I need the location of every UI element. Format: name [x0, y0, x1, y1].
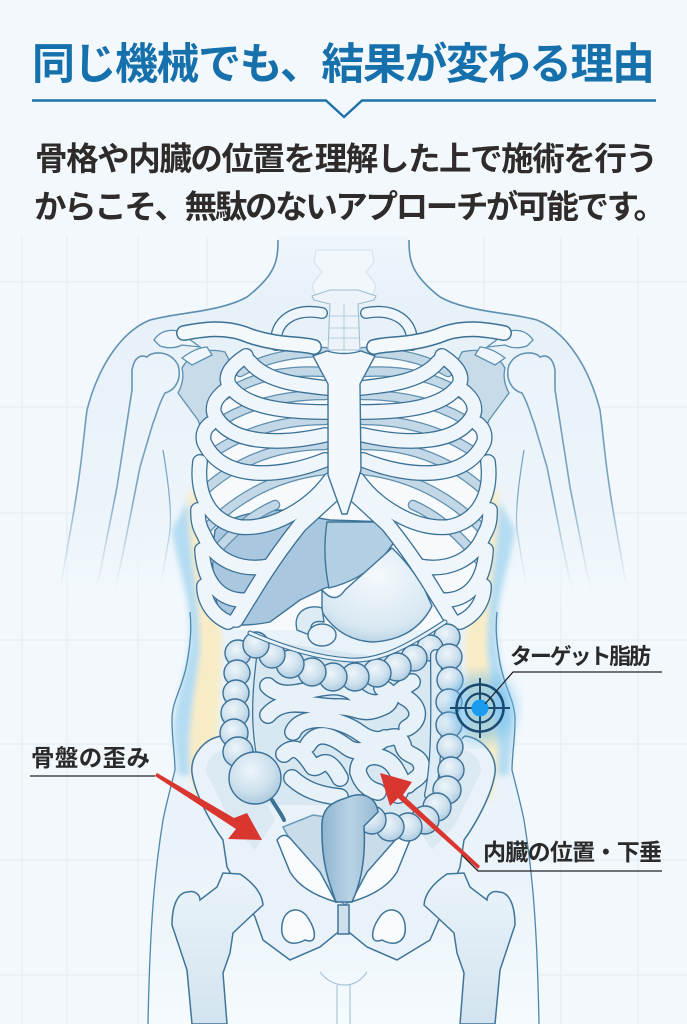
scapulae and acromion — [154, 330, 533, 440]
sternum — [313, 351, 375, 514]
back ribs right — [363, 352, 483, 562]
front ribs left — [198, 356, 336, 622]
rectum — [322, 795, 378, 902]
fat layer bands — [172, 490, 515, 800]
humerus right — [508, 353, 592, 590]
target marker glow — [448, 674, 516, 742]
clavicles — [184, 329, 504, 347]
liver — [213, 510, 397, 625]
title: 同じ機械でも、結果が変わる理由 — [32, 41, 655, 89]
upper first ribs — [276, 312, 412, 345]
target marker — [450, 678, 510, 738]
torso edge lines — [148, 612, 539, 1024]
lower torso and legs — [148, 590, 539, 1024]
label: organ position and ptosis: 内臓の位置・下垂 — [483, 839, 662, 865]
label: pelvis distortion: 骨盤の歪み — [31, 745, 150, 771]
abdominal backing — [228, 625, 462, 838]
back ribs left — [205, 352, 325, 562]
humerus left — [95, 353, 179, 590]
label: target fat — [485, 644, 662, 704]
label: target fat: ターゲット脂肪 — [510, 644, 651, 669]
subtitle text: からこそ、無駄のないアプローチが可能です。 — [34, 188, 666, 225]
ascending colon — [220, 640, 281, 804]
chest cavity — [199, 340, 489, 630]
arrow: organs — [380, 773, 480, 869]
upper body and arms — [60, 236, 627, 610]
lower body lines — [320, 972, 367, 1024]
stomach and pancreas — [296, 548, 432, 646]
subtitle text — [34, 141, 666, 225]
subtitle text: 骨格や内臓の位置を理解した上で施術を行う — [35, 141, 658, 177]
appendix — [272, 800, 284, 820]
front ribs right — [352, 356, 490, 622]
intestines — [220, 622, 464, 902]
transverse colon — [243, 622, 460, 691]
descending and sigmoid colon — [358, 644, 464, 841]
pelvis — [192, 736, 495, 960]
title divider with notch — [32, 100, 656, 117]
small intestine — [268, 682, 422, 797]
femurs — [172, 873, 515, 1024]
rib cage — [198, 352, 490, 622]
spine — [312, 250, 376, 350]
arrow: pelvis — [155, 773, 262, 840]
